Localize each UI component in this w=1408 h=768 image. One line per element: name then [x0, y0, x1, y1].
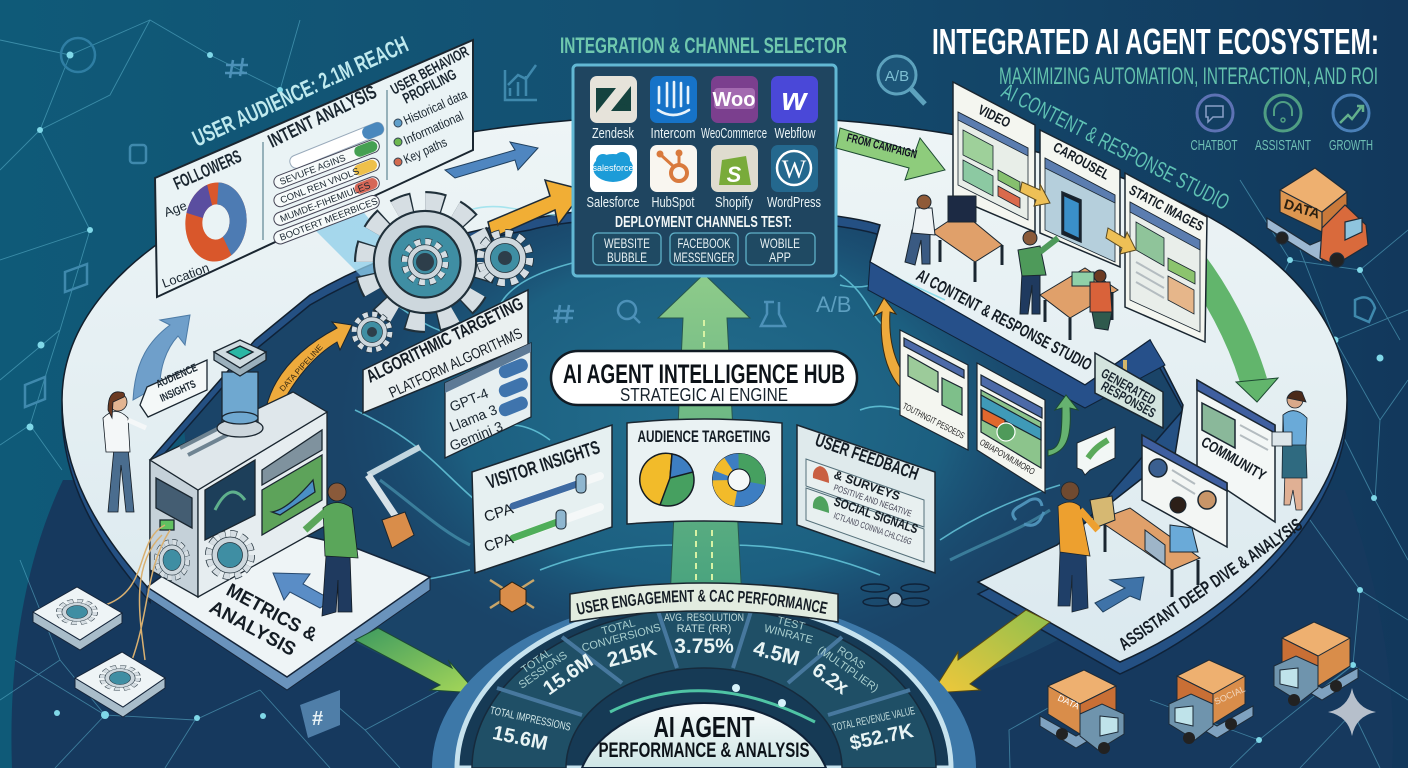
- person: woman right: [1272, 391, 1307, 510]
- deployment button labels: BUBBLE: [607, 249, 647, 265]
- slider labels: CPA: [482, 500, 516, 526]
- panel: integration and channel selector: [560, 33, 847, 276]
- integration labels: Webflow: [774, 125, 816, 142]
- metric: total conversions: TOTAL: [600, 617, 637, 638]
- sign: generated responses: RESPONSES: [1099, 379, 1158, 421]
- divider: [263, 90, 387, 240]
- callout: audience insights: INSIGHTS: [158, 378, 198, 405]
- glow arc: [610, 691, 815, 722]
- metric: total impressions: TOTAL IMPRESSIONS: [489, 705, 572, 734]
- metric: total impressions: [484, 705, 572, 759]
- panel: video: [953, 82, 1035, 232]
- dome title: AI AGENT: [654, 712, 755, 744]
- big green arrow: [1190, 258, 1278, 402]
- arrow: from campaign: FROM CAMPAIGN: [845, 130, 919, 161]
- heading: ai content studio: AI CONTENT & RESPONSE STUDIO: [998, 78, 1234, 215]
- segment dividers: [497, 608, 910, 715]
- metric: total revenue: $52.7K: [848, 720, 916, 755]
- logo: webflow: w: [782, 81, 809, 117]
- panel: visitor insights: [472, 425, 612, 573]
- data flows: [340, 207, 1060, 584]
- panel: models: Gemini 3: [447, 418, 505, 454]
- callout: audience insights: [140, 360, 207, 417]
- metric: total impressions: 15.6M: [491, 722, 550, 755]
- sign: generated responses: [1095, 353, 1163, 428]
- logo: woocommerce: Woo: [713, 89, 755, 111]
- central green arrow: [658, 274, 750, 600]
- curved orange arrow: [874, 298, 930, 400]
- user behavior profiling: USER BEHAVIOR: [388, 43, 472, 99]
- gear plate bottom: [75, 652, 165, 717]
- gear plate top: [33, 587, 122, 650]
- card: social signals: ICTLAND COINNA CHLC16G: [832, 510, 913, 547]
- response sheet right: [977, 363, 1045, 493]
- panel: user audience: [155, 31, 473, 297]
- followers title: FOLLOWERS: [170, 146, 244, 194]
- intent rows: MUMDE-FIHEMIULES: [279, 180, 372, 225]
- arrow: orange data feed: [266, 322, 352, 408]
- blue arrow on right platform: [1095, 577, 1144, 612]
- truck label: DATA: [1282, 196, 1322, 222]
- metric: total revenue: [831, 705, 921, 758]
- deployment button labels: [604, 235, 800, 265]
- icon: growth: [1333, 95, 1369, 131]
- metric: roas: (MULTIPLIER): [815, 644, 880, 695]
- arrow: metrics to dome: [355, 628, 477, 693]
- response sheet right: OBIAPOVMUMORO: [978, 437, 1037, 477]
- deployment button labels: WOBILE: [760, 235, 800, 251]
- metric: total conversions: 215K: [605, 637, 659, 672]
- integration labels: Zendesk: [592, 125, 634, 142]
- background icons: [25, 38, 1375, 407]
- icon: cargo drone: [490, 580, 534, 612]
- icon: chain link: [1013, 499, 1044, 525]
- icon: assistant: [1265, 95, 1301, 131]
- truck: delivery two: SOCIAL: [1213, 684, 1247, 707]
- glow nodes: [732, 684, 786, 707]
- metrics text: ANALYSIS: [206, 597, 299, 661]
- person: woman left: [103, 392, 146, 512]
- seated worker desk: [1040, 268, 1118, 340]
- intent rows: SEVUFE AGINS: [278, 153, 347, 188]
- deployment buttons: [593, 233, 815, 265]
- logo: woocommerce: [711, 76, 758, 123]
- panel: models: Llama 3: [447, 401, 500, 435]
- panel: models: [445, 343, 531, 458]
- card: social signals: [806, 488, 924, 562]
- deployment button labels: MESSENGER: [674, 249, 734, 265]
- panel: audience targeting: AUDIENCE TARGETING: [638, 427, 770, 446]
- cables: [105, 525, 170, 660]
- blue arrow to selector: [445, 142, 538, 178]
- icon labels: CHATBOT: [1190, 137, 1238, 154]
- donut chart: [712, 453, 766, 507]
- metric: roas: [802, 635, 887, 714]
- person: man yellow: [1058, 482, 1098, 612]
- logo: wordpress: [771, 145, 818, 192]
- truck: delivery one: [1040, 670, 1124, 754]
- platform ring: [62, 115, 1347, 662]
- location label: Location: [160, 260, 211, 291]
- light beam: [290, 190, 395, 290]
- sparkle icon: [1328, 688, 1376, 736]
- intent analysis title: INTENT ANALYSIS: [265, 82, 380, 152]
- sign: algorithmic targeting: PLATFORM ALGORITHMS: [387, 325, 525, 402]
- icon: drone: [861, 584, 929, 607]
- panel: video: VIDEO: [976, 101, 1013, 131]
- user behavior profiling: Key paths: [401, 134, 450, 167]
- desk and seated assistant: [1090, 496, 1200, 597]
- metric: test winrate: TEST: [776, 615, 806, 633]
- data truck: [1267, 168, 1368, 267]
- yellow arrow to selector: [488, 180, 584, 238]
- big gear: [365, 202, 485, 322]
- icon labels: ASSISTANT: [1255, 137, 1311, 154]
- integration labels: WordPress: [767, 194, 821, 211]
- logo: wordpress: W: [782, 155, 807, 184]
- metric: total conversions: CONVERSIONS: [581, 622, 662, 654]
- slider labels: [482, 500, 516, 556]
- selector heading: INTEGRATION & CHANNEL SELECTOR: [560, 33, 847, 58]
- robot arm: [368, 447, 420, 548]
- man at carousel: [1018, 231, 1058, 314]
- small gear right: [481, 234, 529, 282]
- metric: total sessions: [510, 630, 597, 710]
- platform label: assistant: ASSISTANT DEEP DIVE & ANALYSIS: [1115, 514, 1306, 654]
- slider two: [513, 507, 600, 538]
- person: man green: [305, 483, 358, 616]
- icon labels: [1190, 137, 1373, 154]
- sign: generated responses: GENERATED: [1099, 366, 1158, 408]
- icon: hash tag: #: [312, 708, 323, 730]
- panel: user feedback: [797, 425, 935, 573]
- intent rows: [253, 138, 400, 246]
- metric: resolution rate: RATE (RR): [677, 623, 731, 635]
- panel: models: GPT-4: [447, 385, 491, 415]
- integration labels: Salesforce: [586, 194, 640, 211]
- panel: performance dome: [432, 582, 976, 768]
- metrics text: METRICS &: [223, 580, 321, 646]
- response sheet left: TOUTHNGIT PESOEDS: [901, 401, 966, 441]
- arrow: video to carousel: [1020, 182, 1050, 206]
- sign: algorithmic targeting: [363, 290, 528, 413]
- studio platform underside: [868, 262, 1165, 408]
- banner: user engagement: USER ENGAGEMENT & CAC PERFORMANCE: [576, 590, 828, 614]
- slider labels: CPA: [482, 530, 516, 556]
- metric: test winrate: WINRATE: [763, 623, 814, 647]
- blue arrow on metrics platform: [273, 573, 332, 608]
- deployment button labels: WEBSITE: [604, 235, 650, 251]
- slider one: [513, 474, 600, 506]
- metric: resolution rate: [664, 612, 744, 658]
- machine: [150, 340, 327, 597]
- user behavior profiling: PROFILING: [400, 66, 459, 108]
- integration labels: [586, 125, 821, 211]
- panel: visitor insights: VISITOR INSIGHTS: [484, 437, 603, 494]
- panel: community: [1197, 380, 1275, 522]
- age label: Age: [162, 198, 189, 220]
- metric: test winrate: 4.5M: [751, 637, 802, 671]
- truck: delivery three: [1274, 622, 1358, 706]
- pie chart: [640, 453, 694, 506]
- arrow: assistant to dome: [932, 610, 1050, 693]
- integration labels: WeoCommerce: [701, 125, 767, 142]
- inner dome: [582, 703, 826, 768]
- callout: audience insights: AUDIENCE: [154, 362, 199, 391]
- panel: carousel: [1040, 130, 1120, 267]
- user behavior profiling: Informational: [401, 108, 466, 148]
- metric: total sessions: SESSIONS: [517, 649, 570, 691]
- panel: user feedback: USER FEEDBACH: [813, 430, 921, 484]
- gear hub: [405, 242, 445, 282]
- arrow: from campaign: [836, 128, 945, 180]
- intent rows: BOOTERT MEERBICES: [278, 196, 379, 244]
- logo: salesforce: [590, 145, 637, 192]
- card: surveys: & SURVEYS: [832, 468, 902, 503]
- integration labels: HubSpot: [652, 194, 695, 211]
- metric: total conversions: [578, 611, 668, 678]
- platform ring underside: [62, 125, 1347, 674]
- desk and woman at studio: [905, 195, 1002, 282]
- panel: audience targeting: [627, 419, 782, 524]
- metrics platform: [147, 520, 430, 690]
- logo: zendesk: [590, 76, 637, 123]
- integration labels: Intercom: [650, 125, 696, 142]
- card: surveys: POSITIVE AND NEGATIVE: [832, 482, 913, 519]
- platform label: studio: AI CONTENT & RESPONSE STUDIO: [913, 266, 1095, 375]
- hub title: AI AGENT INTELLIGENCE HUB: [563, 359, 845, 389]
- deployment heading: DEPLOYMENT CHANNELS TEST:: [615, 214, 792, 231]
- metric: roas: ROAS: [835, 644, 867, 672]
- user behavior profiling: Historical data: [401, 86, 470, 128]
- metric: total sessions: 15.6M: [539, 650, 597, 700]
- arrow: carousel to static: [1106, 228, 1136, 254]
- icon: A/B magnifier: A/B: [885, 68, 909, 85]
- card: surveys: [806, 459, 924, 527]
- icon: chatbot: [1197, 95, 1233, 131]
- intent rows: CONL REN VNOLS: [279, 166, 361, 206]
- card: social signals: SOCIAL SIGNALS: [832, 494, 920, 537]
- icon labels: GROWTH: [1329, 137, 1373, 154]
- user behavior profiling: [388, 43, 472, 167]
- metric: test winrate: [751, 611, 817, 673]
- logo: hubspot: [650, 145, 697, 192]
- logo: shopify: S: [727, 162, 742, 187]
- arrow: audience insights loop: [133, 315, 190, 400]
- icon: hash tag: [300, 690, 340, 738]
- logo: shopify: [711, 145, 758, 192]
- response sheet left: [900, 330, 968, 450]
- arrow: orange data feed: DATA PIPELINE: [278, 343, 325, 393]
- metric: total revenue: TOTAL REVENUE VALUE: [831, 705, 916, 734]
- icon: A/B magnifier: [878, 56, 925, 104]
- small gear left: [354, 314, 390, 350]
- logo: salesforce: salesforce: [592, 163, 634, 173]
- deployment button labels: APP: [769, 249, 791, 265]
- dome subtitle: PERFORMANCE & ANALYSIS: [598, 739, 810, 762]
- metric: total sessions: TOTAL: [519, 647, 554, 676]
- truck: delivery two: [1169, 660, 1253, 744]
- metric: roas: 6.2x: [808, 659, 852, 699]
- logo: webflow: [771, 76, 818, 123]
- green U arrow: [1048, 395, 1078, 456]
- panel: carousel: CAROUSEL: [1051, 139, 1113, 183]
- metric: resolution rate: AVG. RESOLUTION: [664, 612, 744, 624]
- chat bubble link: [1077, 427, 1115, 475]
- hub subtitle: STRATEGIC AI ENGINE: [620, 385, 788, 405]
- deployment button labels: FACEBOOK: [678, 235, 731, 251]
- search bar: [288, 121, 386, 170]
- integration labels: Shopify: [715, 194, 753, 211]
- logo: intercom: [650, 76, 697, 123]
- panel: static images: STATIC IMAGES: [1127, 182, 1207, 234]
- followers donut chart: [191, 192, 241, 252]
- panel: static images: [1125, 173, 1207, 342]
- panel: assistant monitor: [1142, 435, 1227, 547]
- panel: intelligence hub: [551, 351, 857, 405]
- panel: community: COMMUNITY: [1198, 434, 1269, 484]
- truck: delivery one: DATA: [1056, 693, 1081, 711]
- icon: A/B label: A/B: [816, 292, 851, 317]
- metric: resolution rate: 3.75%: [674, 635, 734, 658]
- sign: algorithmic targeting: ALGORITHMIC TARGETING: [363, 293, 526, 387]
